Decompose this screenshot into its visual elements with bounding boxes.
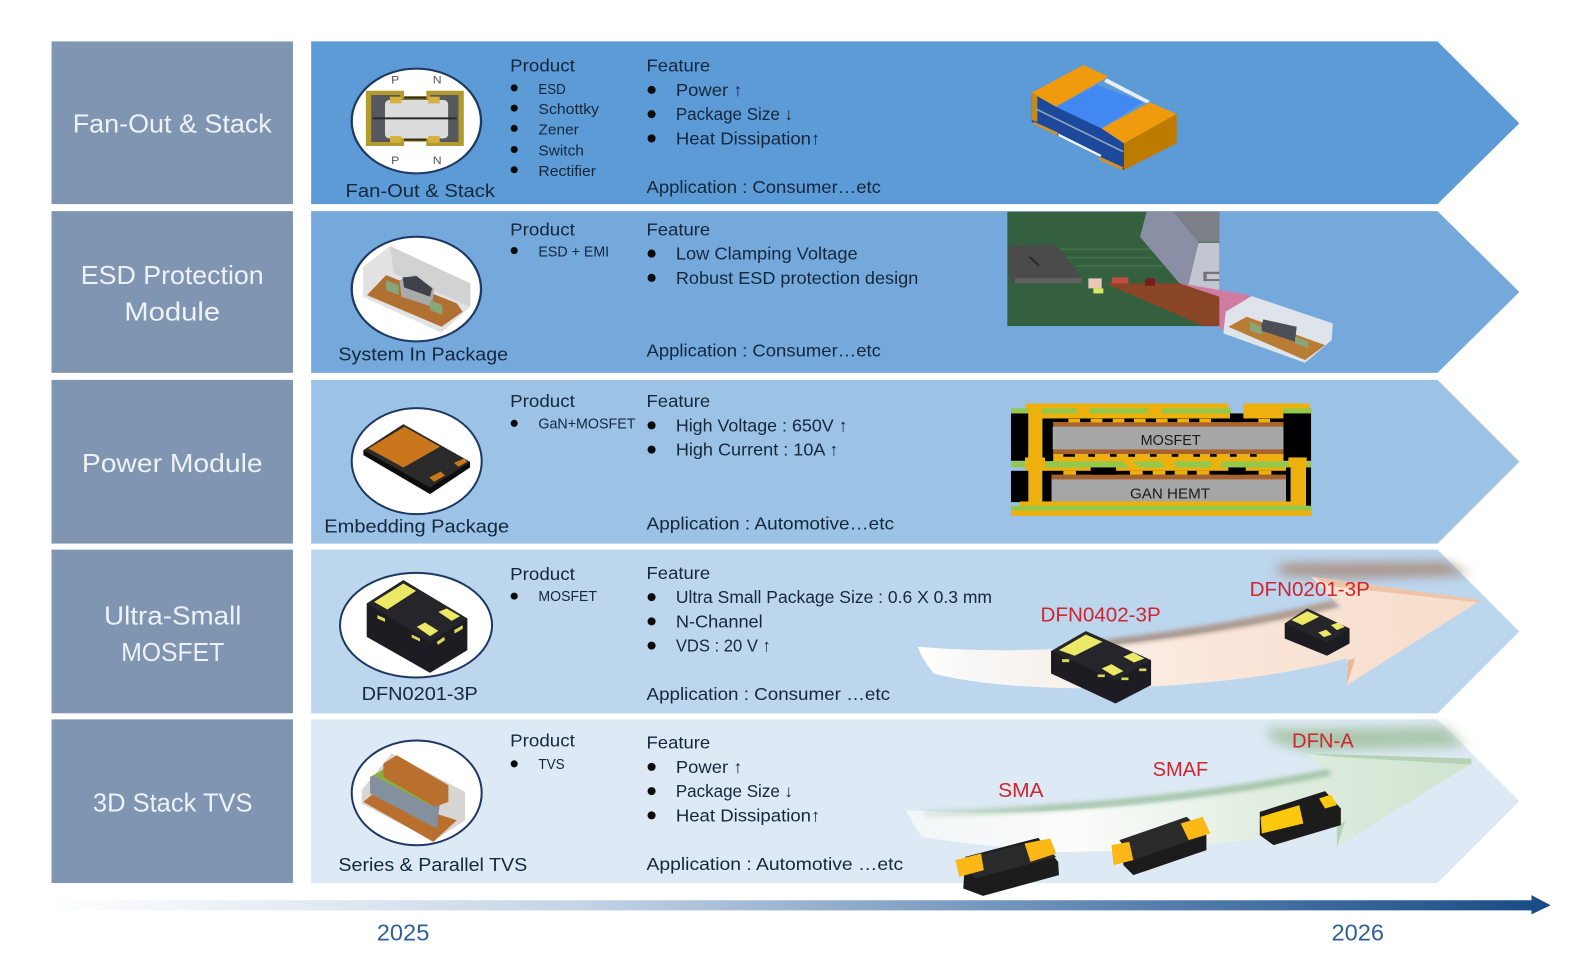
- product list: ESD: [538, 81, 566, 98]
- chevron band: [311, 41, 1519, 204]
- category label: Ultra-Small MOSFET: MOSFET: [121, 637, 224, 667]
- feature list: Low Clamping Voltage: [676, 244, 858, 264]
- feature list: Power ↑: [676, 757, 743, 777]
- product caption: Fan-Out & Stack: [345, 180, 496, 201]
- product list: TVS: [538, 756, 565, 773]
- category label: Fan-Out & Stack: Fan-Out & Stack: [73, 108, 273, 138]
- timeline arrow: [51, 895, 1551, 914]
- application: Application : Automotive …etc: [647, 854, 903, 874]
- product list: Rectifier: [538, 163, 596, 180]
- chip: DFN0402-3P: [1051, 631, 1151, 703]
- application: Application : Consumer…etc: [647, 341, 881, 361]
- chevron band: [311, 550, 1519, 713]
- icon: DFN0201-3P package: [340, 573, 492, 678]
- application: Application : Consumer …etc: [647, 684, 890, 704]
- icon: fan-out package top view: N: [433, 156, 442, 167]
- icon: series and parallel TVS: [352, 741, 482, 845]
- panel: Power Module row: [52, 380, 1519, 544]
- feature list: [647, 391, 848, 460]
- feature list: N-Channel: [676, 611, 763, 631]
- chip: SMA: [955, 838, 1059, 896]
- feature list: Feature: [647, 56, 710, 76]
- feature list: High Voltage : 650V ↑: [676, 415, 848, 435]
- product caption: System In Package: [338, 344, 508, 365]
- product list: MOSFET: [538, 588, 597, 605]
- chevron band: [311, 211, 1519, 373]
- icon: fan-out package top view: P: [391, 156, 400, 167]
- category label: Power Module: [52, 380, 293, 544]
- product list: [510, 56, 599, 180]
- category label: Power Module: Power Module: [82, 448, 263, 478]
- product list: Product: [510, 219, 575, 239]
- illustration: package shrink arrow with chips: [918, 562, 1481, 703]
- category label: Ultra-Small MOSFET: Ultra-Small: [104, 600, 241, 630]
- product list: Product: [510, 564, 575, 584]
- product list: Product: [510, 731, 575, 751]
- illustration: MOSFET and GaN HEMT cross-section: MOSFET: [1141, 433, 1201, 449]
- panel: ESD Protection Module row: [52, 211, 1519, 373]
- feature list: [647, 733, 820, 825]
- red label: DFN0201-3P: DFN0201-3P: [1250, 579, 1370, 601]
- feature list: High Current : 10A ↑: [676, 440, 838, 460]
- product list: Product: [510, 391, 575, 411]
- product list: Schottky: [538, 101, 599, 118]
- feature list: [647, 563, 992, 656]
- feature list: Feature: [647, 391, 710, 411]
- icon: fan-out package top view: [352, 69, 481, 173]
- product list: Zener: [538, 121, 579, 138]
- feature list: Package Size ↓: [676, 781, 793, 801]
- illustration: MOSFET and GaN HEMT cross-section: GAN HEMT: [1130, 486, 1210, 502]
- application: Application : Consumer…etc: [647, 177, 881, 197]
- product caption: DFN0201-3P: [362, 683, 478, 704]
- chip: DFN0201-3P: [1285, 608, 1350, 656]
- feature list: VDS : 20 V ↑: [676, 636, 771, 656]
- panel: Fan-Out & Stack row: [52, 41, 1519, 204]
- product list: [510, 391, 635, 432]
- feature list: Heat Dissipation↑: [676, 805, 820, 825]
- chip: DFN-A: [1260, 791, 1341, 845]
- category label: Ultra-Small MOSFET: [52, 550, 293, 713]
- icon: system in package: [352, 237, 481, 341]
- product caption: Series & Parallel TVS: [338, 854, 527, 875]
- product list: [510, 219, 609, 261]
- category label: ESD Protection Module: ESD Protection: [81, 260, 264, 290]
- category label: 3D Stack TVS: [52, 719, 293, 883]
- feature list: Feature: [647, 733, 710, 753]
- category label: Fan-Out & Stack: [52, 41, 293, 204]
- product list: Product: [510, 56, 575, 76]
- panel: Ultra-Small MOSFET row: [52, 550, 1519, 713]
- feature list: Ultra Small Package Size : 0.6 X 0.3 mm: [676, 587, 992, 607]
- category label: ESD Protection Module: Module: [124, 296, 220, 326]
- product list: [510, 731, 575, 773]
- chevron band: [311, 719, 1519, 883]
- feature list: [647, 219, 918, 288]
- panel: 3D Stack TVS row: [52, 719, 1519, 896]
- feature list: Robust ESD protection design: [676, 268, 918, 288]
- product list: Switch: [538, 143, 584, 160]
- feature list: Feature: [647, 563, 710, 583]
- red label: SMA: SMA: [998, 780, 1044, 802]
- red label: SMAF: SMAF: [1153, 759, 1208, 781]
- red label: DFN-A: DFN-A: [1292, 731, 1354, 753]
- red label: DFN0402-3P: DFN0402-3P: [1041, 604, 1161, 626]
- illustration: package evolution arrow with chips: [906, 727, 1471, 896]
- product caption: Embedding Package: [324, 515, 509, 536]
- icon: fan-out package top view: P: [391, 75, 400, 86]
- product list: ESD + EMI: [538, 244, 609, 261]
- icon: fan-out package top view: N: [433, 75, 442, 86]
- product list: GaN+MOSFET: [538, 415, 635, 432]
- year label: 2026: 2026: [1331, 920, 1384, 946]
- illustration: MOSFET and GaN HEMT cross-section: [1011, 403, 1312, 516]
- chip: SMAF: [1112, 817, 1210, 875]
- illustration: stacked chip: [1032, 65, 1177, 170]
- icon: embedding package: [352, 408, 482, 514]
- illustration: board with SiP callout: [1007, 212, 1333, 363]
- category label: 3D Stack TVS: 3D Stack TVS: [93, 787, 253, 817]
- application: Application : Automotive…etc: [647, 513, 894, 533]
- product list: [510, 564, 597, 605]
- feature list: [647, 56, 820, 148]
- year label: 2025: 2025: [377, 920, 429, 946]
- chevron band: [311, 380, 1519, 544]
- feature list: Heat Dissipation↑: [676, 128, 820, 148]
- feature list: Package Size ↓: [676, 104, 793, 124]
- feature list: Feature: [647, 219, 710, 239]
- feature list: Power ↑: [676, 80, 743, 100]
- category label: ESD Protection Module: [52, 211, 293, 373]
